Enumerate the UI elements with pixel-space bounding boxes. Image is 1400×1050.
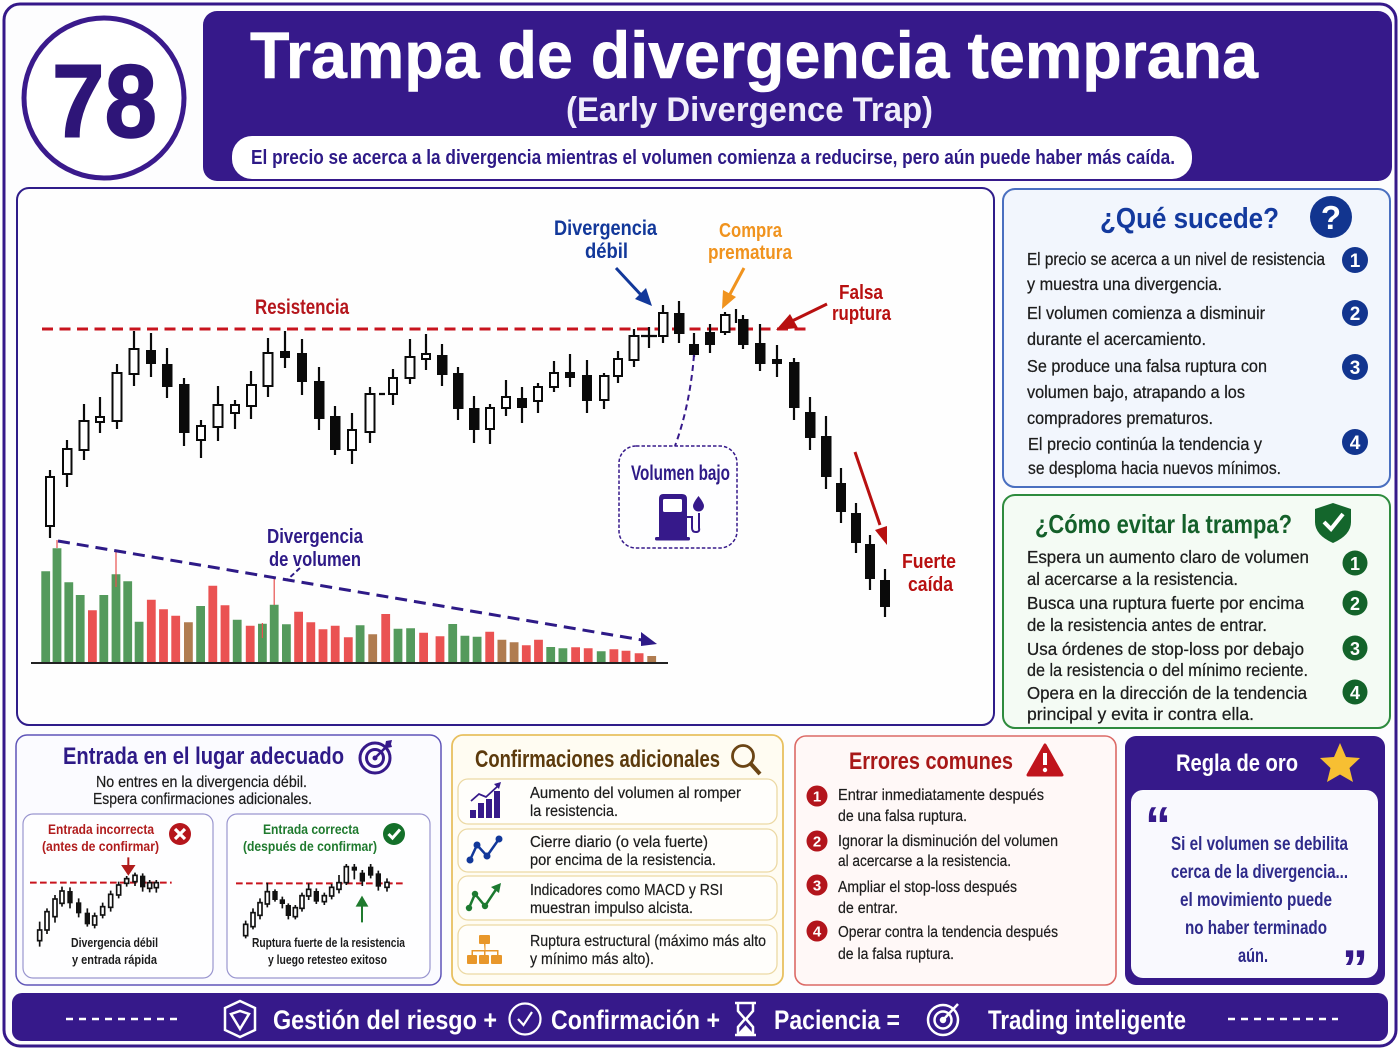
step list: volumen bajo, atrapando a los — [1027, 382, 1245, 402]
number badges: 1 — [1350, 251, 1361, 272]
panel: additional confirmations — [452, 735, 783, 985]
callout: low volume: Volumen bajo — [631, 462, 730, 485]
mistakes list: Ignorar la disminución del volumen — [838, 833, 1058, 850]
icon: question mark — [1310, 196, 1352, 238]
mistakes list: de entrar. — [838, 900, 898, 917]
step list: El precio se acerca a un nivel de resistencia — [1027, 249, 1325, 269]
candlestick chart — [46, 301, 890, 617]
row: structure: Ruptura estructural (máximo más alto — [530, 933, 766, 950]
label: strong drop: caída — [908, 574, 954, 596]
icon: target — [360, 740, 392, 773]
number badges: 4 — [1350, 683, 1360, 703]
label: false breakout: ruptura — [832, 303, 892, 325]
label: weak divergence: Divergencia — [554, 217, 657, 240]
step list: El precio continúa la tendencia y — [1028, 434, 1262, 454]
icon: fuel pump — [655, 494, 704, 540]
mistakes list: de una falsa ruptura. — [838, 808, 967, 825]
arrow: weak divergence — [616, 268, 652, 306]
sub-panel: incorrect entry: Entrada incorrecta — [48, 821, 154, 837]
quote box — [1131, 790, 1378, 998]
heading: ¿Cómo evitar la trampa? — [1035, 509, 1292, 539]
arrow: entry point — [123, 857, 134, 874]
number badges: 1 — [1350, 554, 1360, 574]
number badges: 3 — [1350, 358, 1360, 379]
intro text: Espera confirmaciones adicionales. — [93, 791, 312, 808]
panel: how to avoid the trap — [1003, 495, 1390, 728]
badge: number 78 — [24, 18, 184, 178]
icon: warning — [1028, 745, 1062, 775]
intro text: No entres en la divergencia débil. — [96, 774, 307, 791]
step list: compradores prematuros. — [1027, 408, 1213, 428]
title: Trampa de divergencia temprana — [250, 18, 1259, 92]
mistakes list: de la falsa ruptura. — [838, 946, 954, 963]
arrow: strong drop — [855, 452, 887, 545]
tips list: Opera en la dirección de la tendencia — [1027, 683, 1307, 703]
label: weak divergence — [554, 217, 657, 263]
tips list: Espera un aumento claro de volumen — [1027, 547, 1309, 567]
row: indicators: Indicadores como MACD y RSI — [530, 882, 723, 899]
icon: magnifier — [732, 746, 760, 774]
icon: green trend — [466, 883, 501, 911]
subtitle: (Early Divergence Trap) — [566, 91, 933, 129]
heading: ¿Qué sucede? — [1100, 203, 1279, 235]
footer banner: Gestión del riesgo + — [273, 1005, 497, 1035]
number badges: 4 — [1350, 433, 1361, 454]
icon: line chart — [466, 836, 502, 864]
panel: golden rule — [1125, 736, 1385, 998]
sub-panel: incorrect entry: (antes de confirmar) — [42, 838, 159, 854]
icon: rising bars — [470, 782, 501, 818]
icon: cross — [169, 823, 191, 845]
icon: check circle — [510, 1004, 540, 1034]
header banner — [203, 11, 1392, 181]
arrow: retest — [357, 898, 367, 922]
sub-panel: correct entry: y luego retesteo exitoso — [268, 952, 387, 967]
summary pill — [232, 136, 1192, 179]
row: volume — [458, 779, 777, 824]
label: volume divergence: de volumen — [269, 549, 361, 571]
quote box: Si el volumen se debilita — [1171, 834, 1348, 855]
row: close above — [458, 829, 777, 872]
sub-panel: correct entry — [227, 814, 430, 978]
arrow: false breakout — [776, 304, 827, 330]
quote box: “ — [1145, 797, 1171, 855]
tips list: de la resistencia antes de entrar. — [1027, 615, 1267, 635]
summary pill: El precio se acerca a la divergencia mientras el volumen comienza a reducirse, pero aún puede haber más caída. — [251, 147, 1175, 169]
quote box: ” — [1342, 940, 1368, 998]
quote box: cerca de la divergencia... — [1171, 862, 1348, 883]
panel: right entry point — [16, 735, 441, 985]
mistakes list: Operar contra la tendencia después — [838, 924, 1058, 941]
quote box: el movimiento puede — [1180, 890, 1332, 911]
step list: durante el acercamiento. — [1027, 329, 1206, 349]
heading: Entrada en el lugar adecuado — [63, 743, 344, 770]
step list: El volumen comienza a disminuir — [1027, 303, 1265, 323]
mini chart: early entry — [30, 857, 172, 947]
icon: shield check — [1315, 503, 1351, 543]
number badges: 2 — [1350, 594, 1360, 614]
label: strong drop: Fuerte — [902, 551, 956, 573]
tips list — [1027, 547, 1309, 724]
mistakes list — [838, 787, 1058, 963]
sub-panel: incorrect entry: y entrada rápida — [72, 952, 158, 967]
mistakes list: Ampliar el stop-loss después — [838, 879, 1017, 896]
number badges: 2 — [1350, 304, 1360, 325]
label: premature buy: prematura — [708, 242, 793, 264]
mini chart: confirmed entry — [236, 864, 403, 938]
row: indicators: muestran impulso alcista. — [530, 900, 693, 917]
label: strong drop — [902, 551, 956, 596]
sub-panel: incorrect entry — [23, 814, 213, 978]
label: volume divergence — [267, 526, 364, 580]
panel: main chart — [17, 188, 994, 725]
icon: star — [1320, 743, 1360, 782]
sub-panel: correct entry: Entrada correcta — [263, 821, 359, 837]
label: premature buy — [708, 220, 793, 264]
number badges: 3 — [1350, 639, 1360, 659]
label: premature buy: Compra — [719, 220, 783, 242]
heading: Errores comunes — [849, 748, 1013, 775]
intro text — [93, 774, 312, 808]
footer banner — [12, 993, 1388, 1041]
quote box: aún. — [1238, 946, 1268, 967]
volume bars — [31, 540, 668, 663]
panel: what happens — [1003, 189, 1390, 487]
quote box: no haber terminado — [1185, 918, 1327, 939]
icon: structure — [467, 935, 502, 964]
step list — [1027, 249, 1325, 478]
step list: se desploma hacia nuevos mínimos. — [1028, 458, 1281, 478]
sub-panel: correct entry: (después de confirmar) — [243, 838, 377, 854]
label: false breakout: Falsa — [839, 282, 884, 304]
number badges: 2 — [813, 834, 821, 850]
step list: Se produce una falsa ruptura con — [1027, 356, 1267, 376]
row: structure — [458, 925, 777, 974]
resistance label: Resistencia — [255, 296, 349, 319]
number badges — [1342, 247, 1368, 455]
panel: common mistakes — [795, 736, 1116, 985]
tips list: Busca una ruptura fuerte por encima — [1027, 593, 1304, 613]
icon: target — [928, 1004, 958, 1035]
row: close above: por encima de la resistencia. — [530, 852, 716, 869]
number badges — [806, 786, 828, 942]
number badges: 3 — [813, 878, 821, 894]
icon: check — [383, 823, 405, 845]
sub-panel: correct entry: Ruptura fuerte de la resistencia — [252, 935, 406, 950]
icon: hourglass — [735, 1003, 756, 1035]
mistakes list: Entrar inmediatamente después — [838, 787, 1044, 804]
icon: risk shield — [225, 1001, 255, 1037]
badge: number 78: 78 — [52, 44, 157, 160]
row: structure: y mínimo más alto). — [530, 951, 654, 968]
sub-panel: incorrect entry: Divergencia débil — [71, 935, 158, 950]
callout: low volume — [619, 355, 737, 548]
footer banner: Trading inteligente — [988, 1005, 1186, 1035]
tips list: Usa órdenes de stop-loss por debajo — [1027, 639, 1304, 659]
number badges — [1342, 550, 1368, 704]
step list: y muestra una divergencia. — [1027, 274, 1222, 294]
number badges: 4 — [813, 924, 822, 940]
heading: Confirmaciones adicionales — [475, 746, 720, 773]
row: volume: la resistencia. — [530, 803, 618, 820]
label: false breakout — [832, 282, 892, 325]
heading: Regla de oro — [1176, 750, 1298, 777]
resistance line — [42, 328, 808, 330]
label: weak divergence: débil — [585, 240, 628, 263]
number badges: 1 — [813, 788, 821, 806]
arrow: premature buy — [722, 268, 744, 309]
footer banner: Paciencia = — [774, 1005, 900, 1035]
row: indicators — [458, 876, 777, 920]
tips list: de la resistencia o del mínimo reciente. — [1027, 660, 1308, 680]
row: close above: Cierre diario (o vela fuerte) — [530, 834, 708, 851]
footer banner: Confirmación + — [551, 1005, 720, 1035]
row: volume: Aumento del volumen al romper — [530, 785, 741, 802]
tips list: al acercarse a la resistencia. — [1027, 569, 1238, 589]
mistakes list: al acercarse a la resistencia. — [838, 853, 1011, 870]
tips list: principal y evita ir contra ella. — [1027, 704, 1254, 724]
label: volume divergence: Divergencia — [267, 526, 364, 548]
icon: question mark: ? — [1321, 199, 1341, 236]
arrow: volume divergence trend — [58, 541, 657, 646]
